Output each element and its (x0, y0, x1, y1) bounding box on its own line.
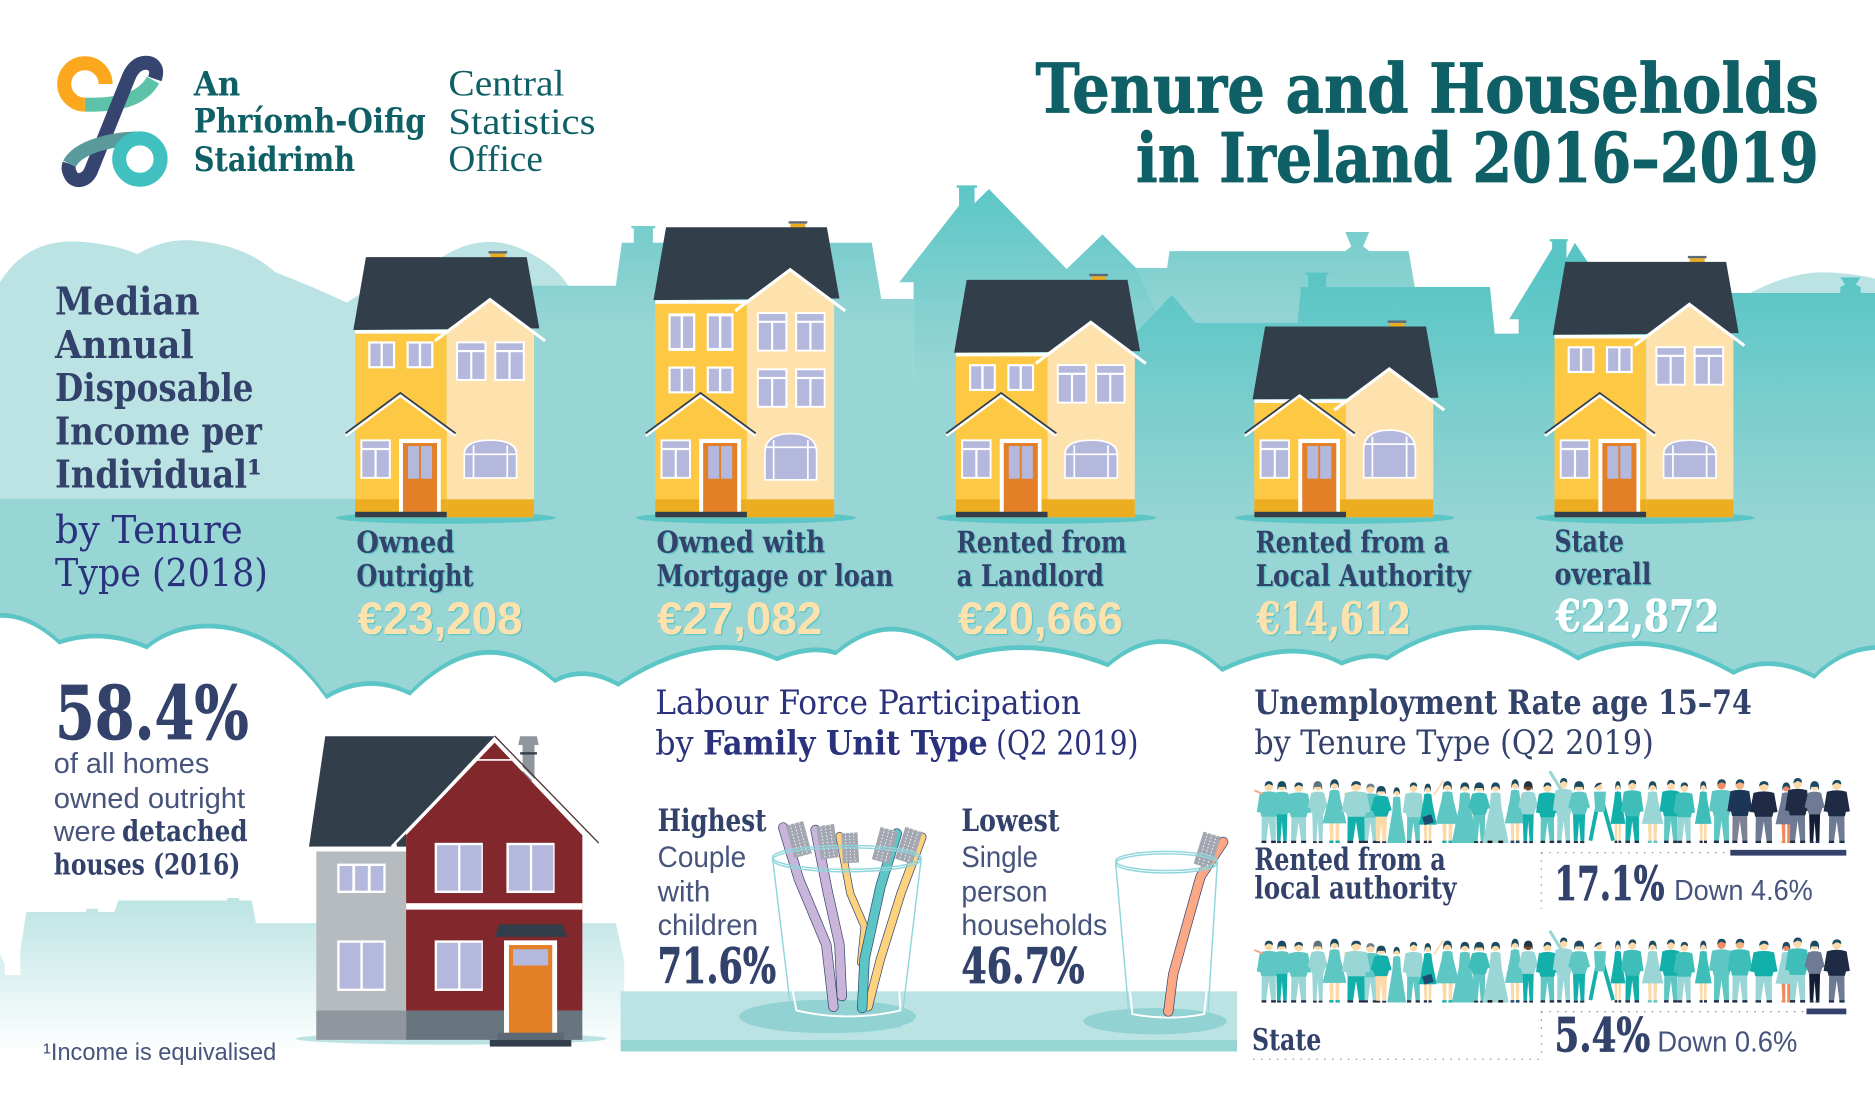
light cloud hills (0, 240, 569, 499)
band fill below skyline (0, 524, 1875, 697)
lowest text: 46.7% (961, 937, 1085, 995)
heading bold: Median (55, 280, 200, 325)
chimney (518, 736, 539, 781)
red body (406, 743, 582, 1010)
description: were (53, 816, 116, 848)
label: state overall: €22,872 (1555, 590, 1720, 642)
logo text: Irish: An (193, 65, 240, 104)
logo text: English (448, 64, 596, 180)
value: 5.4%: Down 0.6% (1657, 1027, 1797, 1059)
value: 17.1%: 17.1% (1555, 856, 1665, 911)
roof (309, 736, 495, 847)
labour force heading: by (655, 724, 694, 763)
house: rented from landlord (936, 274, 1156, 524)
heading bold (54, 280, 263, 497)
labour force heading (655, 683, 1138, 763)
front buildings (1124, 239, 1875, 670)
label: owned with mortgage: Owned with (656, 525, 825, 560)
unemployment bar: state (1253, 1009, 1846, 1059)
label: rented from landlord: Rented from (957, 525, 1126, 560)
label: rented from local authority: €14,612 (1256, 593, 1411, 645)
big number: 58.4% (55, 670, 249, 757)
unemployment heading: by Tenure Type (Q2 2019) (1254, 723, 1654, 762)
label: owned outright (356, 525, 523, 644)
house: owned outright (336, 251, 556, 524)
value: 17.1%: Down 4.6% (1674, 875, 1813, 907)
unemployment heading: Unemployment Rate age 15–74 (1254, 683, 1752, 722)
background skyline (0, 185, 1875, 697)
highest text: 71.6% (658, 937, 776, 995)
unemployment bar: local authority (1541, 850, 1846, 909)
stat: detached houses (53, 670, 249, 882)
people row: local authority (1254, 771, 1850, 843)
icon: glass with one toothbrush (1083, 832, 1227, 1034)
label: rented from landlord: a Landlord (957, 559, 1104, 594)
logo text: Irish: Phríomh-Oifig (194, 102, 426, 141)
lowest text: person (961, 876, 1048, 909)
logo text: Irish (193, 65, 426, 179)
back buildings (532, 226, 1416, 670)
house: state overall (1535, 256, 1755, 524)
title: Tenure and Households (1036, 49, 1819, 129)
highest text: children (658, 909, 758, 942)
house: rented from local authority (1235, 320, 1455, 524)
heading regular: Type (2018) (55, 551, 268, 596)
label: state overall: State (1555, 524, 1624, 559)
people row: state (1254, 931, 1850, 1003)
labour force heading: Labour Force Participation (655, 683, 1081, 722)
value: 5.4% (1555, 1008, 1797, 1063)
peaked gables (899, 185, 1178, 395)
windows (337, 843, 555, 991)
median income heading (54, 280, 268, 596)
label: owned outright: Owned (356, 525, 455, 560)
toothbrush (1168, 842, 1223, 1012)
description: houses (2016) (54, 848, 240, 882)
label: owned outright: €23,208 (358, 593, 523, 644)
highest text: with (657, 876, 710, 909)
hill right (1746, 272, 1875, 295)
awning and door (490, 924, 571, 1047)
grey wing (316, 851, 406, 1010)
highest text: Highest (658, 803, 767, 839)
heading bold: Income per (55, 409, 263, 454)
icon: glass with five toothbrushes (739, 821, 923, 1033)
label: state overall: overall (1555, 558, 1651, 593)
label: owned with mortgage: €27,082 (657, 593, 822, 644)
heading bold: Individual¹ (55, 452, 262, 497)
detached house illustration (296, 736, 607, 1047)
value: 17.1% (1555, 856, 1813, 911)
description: of all homes (54, 748, 209, 780)
lowest text: Lowest (961, 803, 1060, 839)
cloud edge: white lower area (0, 618, 1875, 1095)
footnote: ¹Income is equivalised (43, 1039, 276, 1066)
faint skyline lower left (0, 898, 624, 1052)
logo icon (64, 63, 161, 180)
glass outline (1116, 851, 1217, 1031)
description (53, 748, 248, 882)
label: state overall (1555, 524, 1720, 642)
label: owned outright: Outright (356, 559, 474, 594)
label: rented from local authority: Rented from a (1254, 842, 1446, 878)
logo text: English: Statistics (448, 102, 596, 143)
cloud edge: teal rim (0, 613, 1875, 1090)
logo text: English: Central (448, 64, 564, 105)
heading regular (55, 508, 268, 596)
labour force heading: Family Unit Type (703, 724, 988, 763)
bristles (786, 821, 812, 858)
value: 5.4%: 5.4% (1555, 1008, 1650, 1063)
heading bold: Disposable (55, 366, 254, 411)
description: detached (122, 814, 248, 848)
lowest text: households (961, 909, 1107, 942)
highest text (657, 803, 776, 995)
toothbrushes (783, 827, 922, 1008)
heading bold: Annual (54, 323, 194, 368)
label: rented from local authority: local authority (1254, 871, 1457, 907)
label: rented from local authority (1254, 842, 1457, 907)
label: owned with mortgage: Mortgage or loan (656, 559, 893, 594)
logo text: Irish: Staidrimh (194, 140, 355, 179)
label: state: State (1252, 1023, 1321, 1058)
unemployment heading (1254, 683, 1752, 762)
title (1036, 49, 1819, 199)
label: rented from landlord (957, 525, 1126, 644)
label: rented from local authority (1256, 525, 1472, 645)
shelf (621, 991, 1237, 1051)
title: in Ireland 2016–2019 (1136, 119, 1819, 199)
description: owned outright (54, 783, 245, 815)
label: owned with mortgage (656, 525, 893, 644)
logo text: English: Office (448, 139, 543, 180)
glass outline (772, 845, 921, 1032)
label: rented from local authority: Local Authority (1256, 559, 1472, 594)
lowest text (961, 803, 1107, 995)
heading regular: by Tenure (55, 508, 243, 553)
ground band (0, 286, 532, 670)
lowest text: Single (961, 841, 1038, 874)
highest text: Couple (658, 841, 746, 874)
house: owned with mortgage (636, 221, 856, 524)
label: rented from local authority: Rented from a (1256, 525, 1449, 560)
labour force heading: (Q2 2019) (996, 724, 1138, 763)
label: rented from landlord: €20,666 (958, 593, 1123, 644)
logo (64, 63, 596, 180)
